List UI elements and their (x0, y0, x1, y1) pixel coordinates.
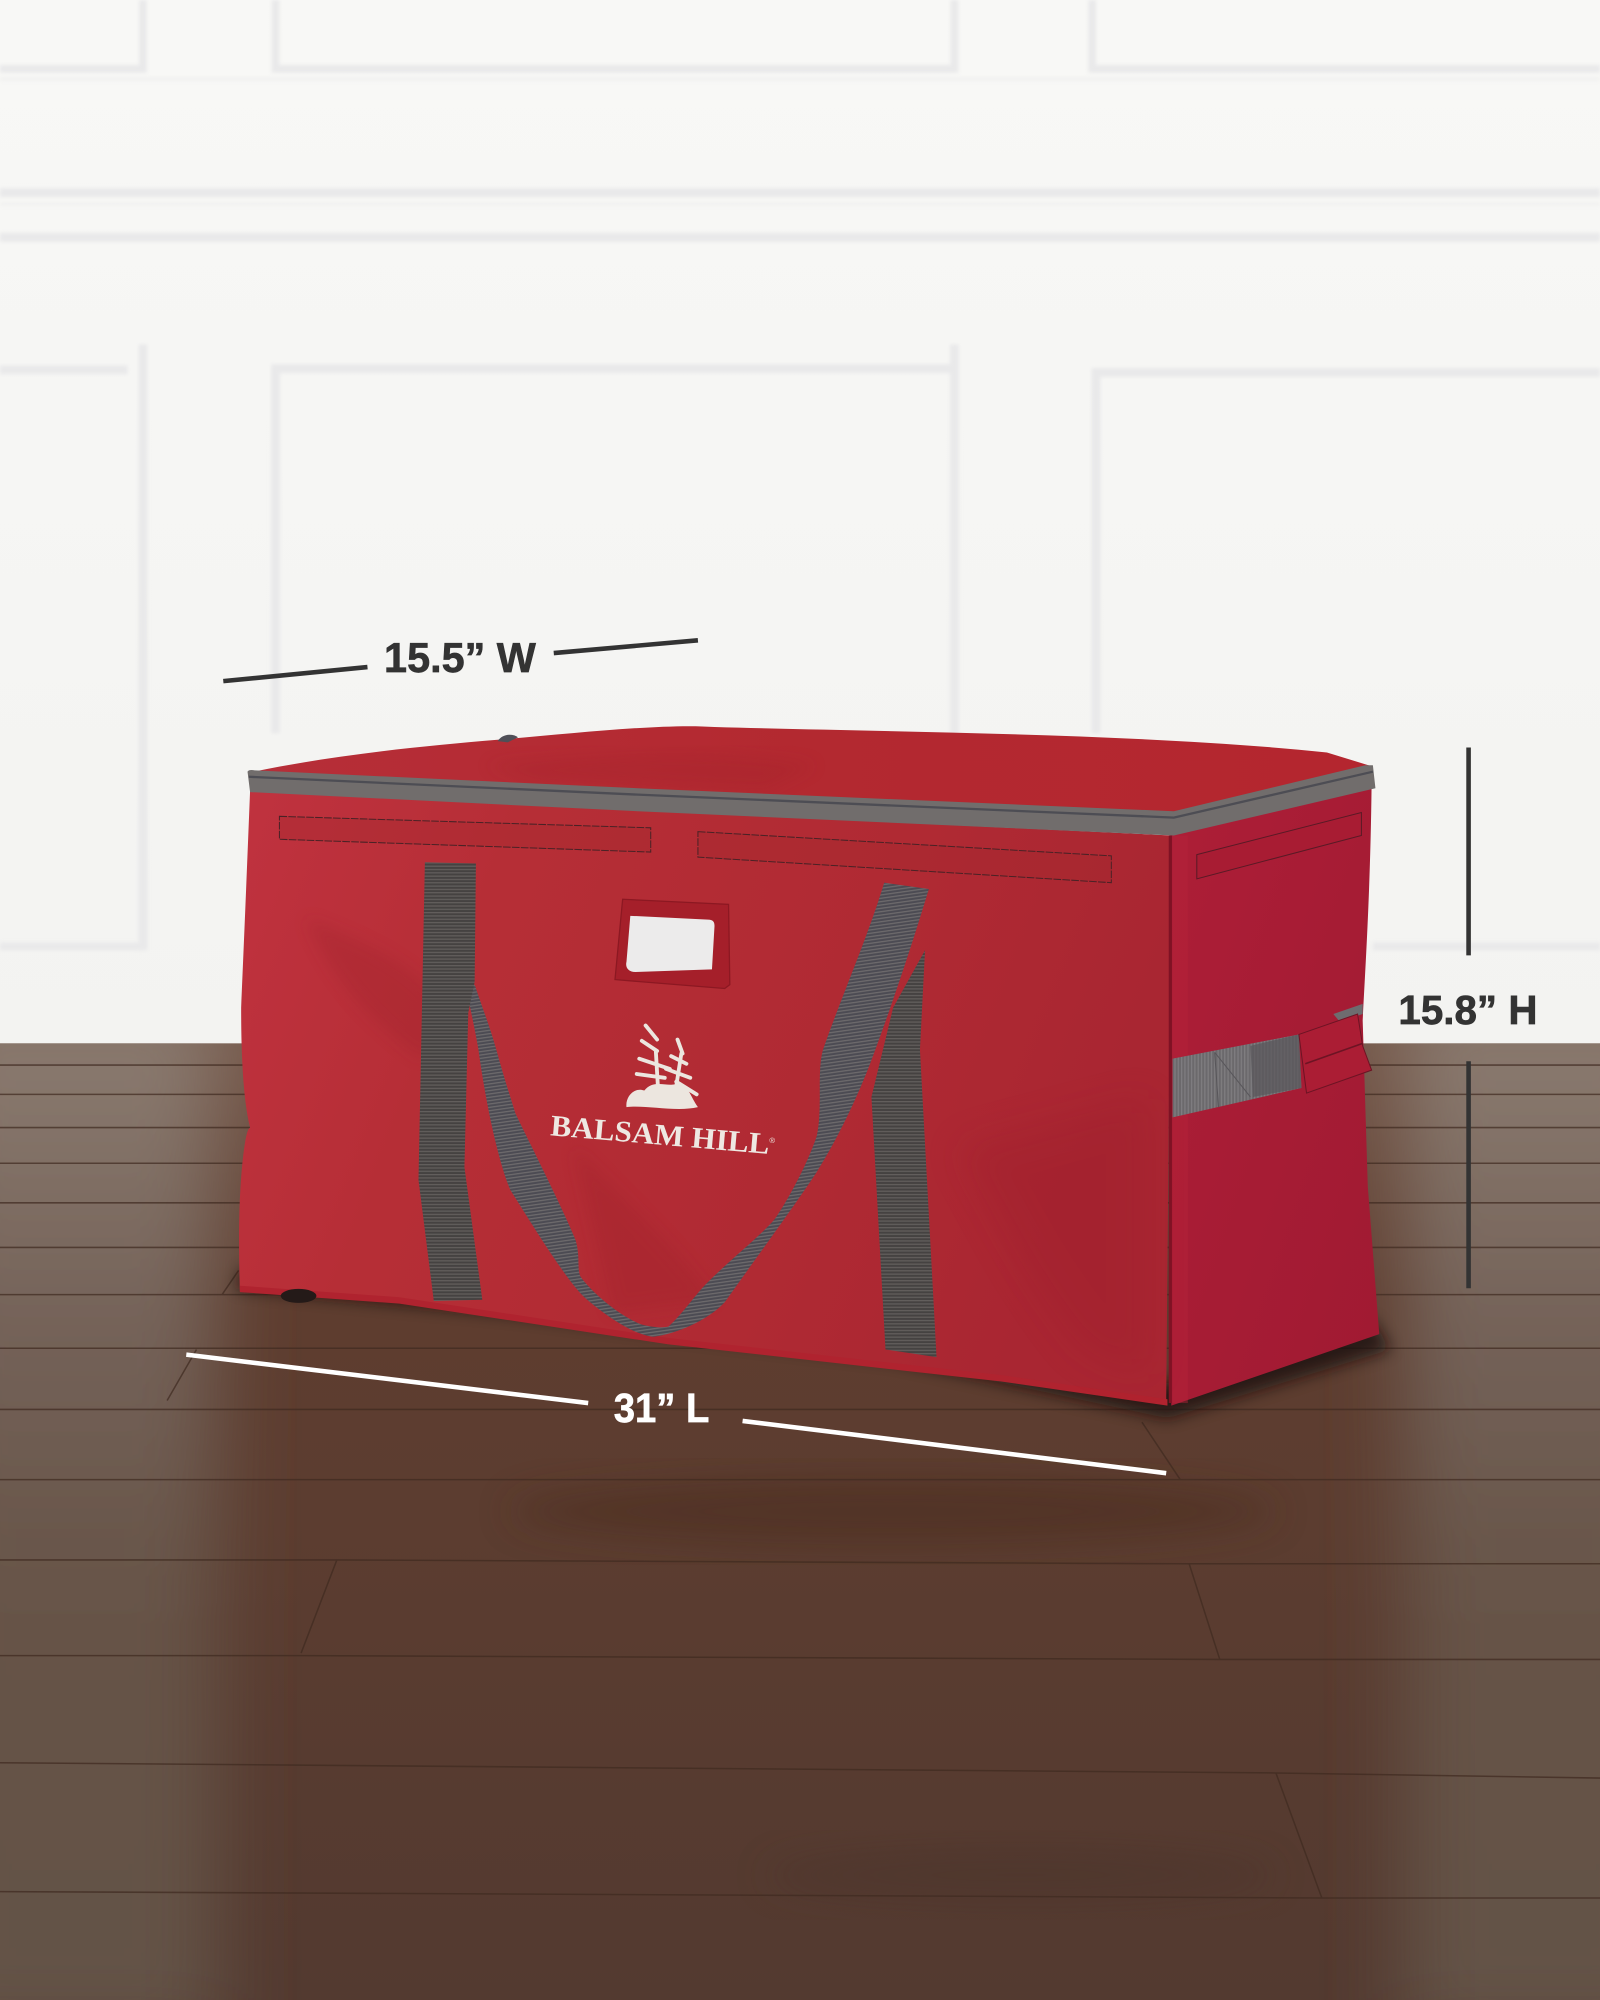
logo snow base (626, 1084, 698, 1109)
side stitched slot (1197, 812, 1361, 879)
front stitched slot right (698, 832, 1111, 883)
bag wheels (281, 1289, 316, 1303)
wood floor (0, 995, 1600, 2000)
width line right (554, 640, 698, 653)
width label: 15.5” W (384, 634, 536, 681)
left strap loop (467, 883, 929, 1337)
right handle strap (871, 950, 937, 1357)
fabric shading (306, 753, 1188, 1403)
bag side panel (1169, 784, 1379, 1406)
length line left (186, 1355, 588, 1403)
logo wordmark: BALSAM HILL (549, 1109, 771, 1161)
length dimension (186, 1355, 1166, 1473)
registered mark: ® (769, 1136, 775, 1145)
front stitched slot left (279, 816, 651, 852)
height line top (1467, 747, 1470, 955)
bag top panel (248, 726, 1373, 816)
storage bag (239, 726, 1379, 1406)
logo trees (637, 1026, 697, 1094)
bag bottom trim (240, 1286, 1167, 1406)
name tag (615, 899, 730, 989)
wall background (0, 0, 1600, 1046)
length line right (743, 1421, 1166, 1473)
height line bottom (1467, 1061, 1470, 1288)
bag front panel (239, 791, 1171, 1403)
width line left (223, 667, 367, 681)
width dimension (223, 634, 698, 681)
left handle strap (419, 862, 482, 1301)
height label: 15.8” H (1398, 987, 1537, 1033)
side handle grip (1299, 1014, 1372, 1093)
brand logo (549, 1026, 775, 1161)
zipper band (248, 765, 1375, 835)
length label: 31” L (614, 1385, 709, 1431)
zipper pull (498, 735, 518, 742)
side handle webbing (1173, 1004, 1363, 1117)
bag shadow (236, 1269, 1391, 1418)
